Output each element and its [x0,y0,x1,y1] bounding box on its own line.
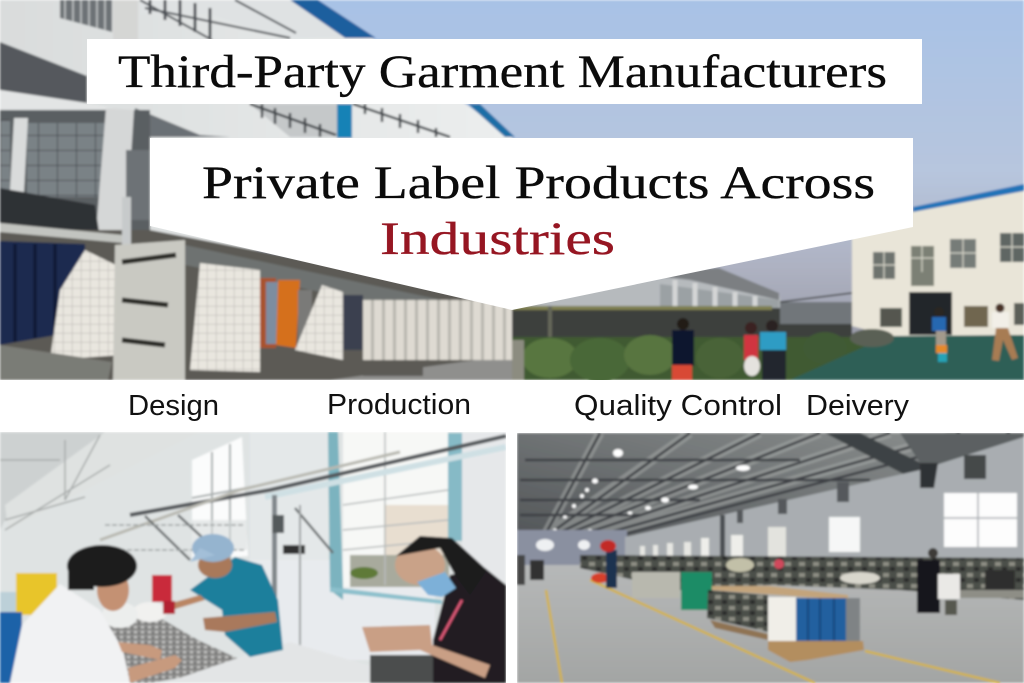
label: design: Design [128,390,219,422]
subtitle banner [150,138,913,310]
far wall [517,528,628,566]
building left [0,0,515,250]
sky [255,0,1024,334]
worker in blue shirt [163,534,283,657]
warehouse ceiling [517,433,1024,538]
storage items [0,573,172,683]
label: delivery: Deivery [806,390,910,422]
distant building [512,268,852,344]
window right [328,432,462,604]
work table [100,602,435,683]
label: production: Production [327,389,471,421]
workshop wall [0,432,506,683]
photo: warehouse floor [517,433,1024,683]
people [672,304,1018,380]
worker in white shirt [10,545,182,683]
subtitle line 2: Industries [380,213,615,265]
ground [790,335,1024,380]
title text: Third-Party Garment Manufacturers [118,46,887,98]
garment racks [0,197,512,380]
process labels [128,389,910,422]
yellow floor lines [546,580,1000,683]
clothes rail [100,436,506,652]
side wall [624,436,1024,560]
rows of goods [517,540,1024,610]
subtitle line 1: Private Label Products Across [202,157,875,209]
pallet with blue drums [707,586,864,662]
hedge [512,332,892,382]
photo: factory exterior and garment racks [0,0,1024,382]
worker in black top with mask [362,536,506,683]
photo: workers inspecting garments [0,432,506,683]
floor [517,565,1024,683]
title banner [87,39,922,104]
window left [192,437,248,560]
white building right [850,184,1024,347]
worker and cart [917,548,1024,615]
label: quality control: Quality Control [574,390,782,422]
